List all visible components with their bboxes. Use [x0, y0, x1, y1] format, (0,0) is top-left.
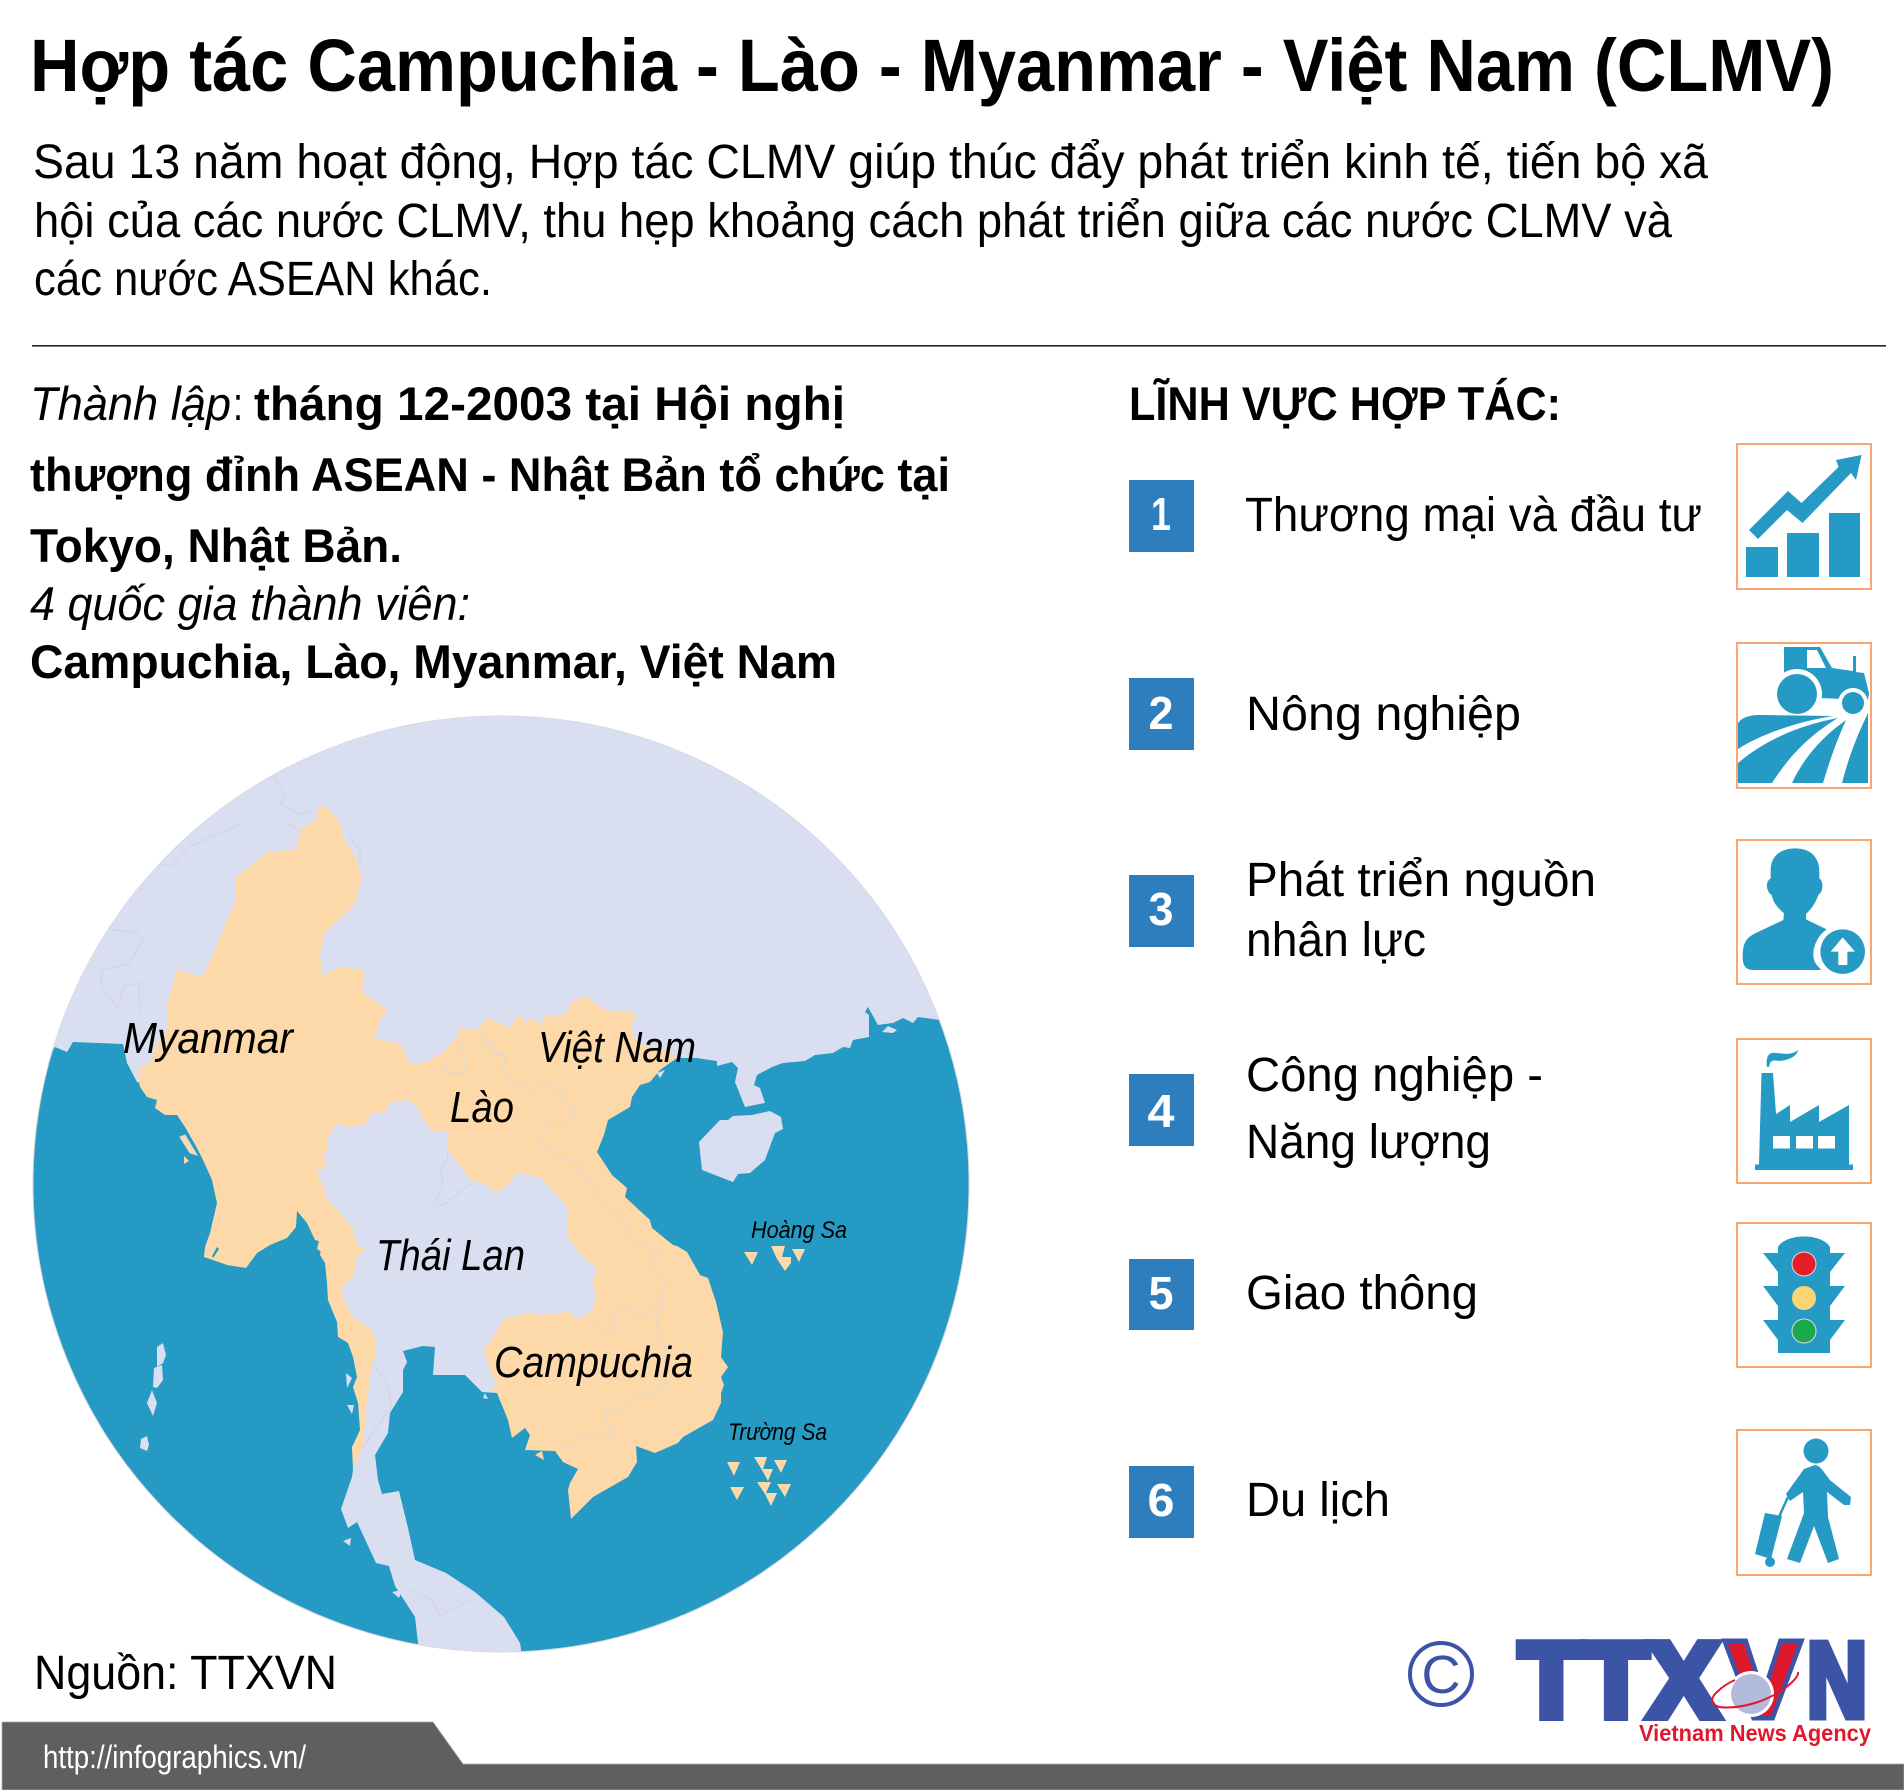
founding info text block: Tokyo, Nhật Bản.	[30, 519, 402, 572]
number badge 3: 3	[1148, 883, 1174, 935]
label: Hoàng Sa: Hoàng Sa	[751, 1217, 847, 1244]
item text 2: Nông nghiệp	[1246, 688, 1521, 741]
item 3: human resources	[1129, 840, 1871, 984]
label: Thái Lan: Thái Lan	[376, 1231, 525, 1280]
item text 4	[1246, 1049, 1543, 1169]
Myanmar	[138, 806, 442, 1470]
item text 3	[1246, 854, 1596, 967]
item 1: trade	[1129, 444, 1871, 589]
item text 3: Phát triển nguồn	[1246, 854, 1596, 907]
coastal details	[180, 1070, 665, 1460]
number badge 3	[1129, 875, 1194, 947]
item 6: tourism	[1129, 1430, 1871, 1575]
Trường Sa islands	[727, 1457, 791, 1506]
item 4: industry and energy	[1129, 1039, 1871, 1183]
item text 4: Công nghiệp -	[1246, 1049, 1543, 1102]
logo: TTXVN: TTX	[1519, 1622, 1719, 1740]
number badge 5: 5	[1148, 1267, 1174, 1319]
founding info text block: thượng đỉnh ASEAN - Nhật Bản tổ chức tại	[30, 448, 950, 501]
source: Nguồn: TTXVN	[34, 1647, 337, 1700]
small coastal islets	[140, 1026, 897, 1598]
number badge 6: 6	[1148, 1474, 1174, 1526]
country borders	[443, 1030, 668, 1451]
logo: TTXVN: N	[1807, 1622, 1867, 1740]
label: Việt Nam: Việt Nam	[538, 1023, 696, 1072]
mainland land	[52, 716, 939, 1652]
number badge 2	[1129, 678, 1194, 750]
number badge 4	[1129, 1074, 1194, 1146]
founding info text block: tháng 12-2003 tại Hội nghị	[254, 377, 845, 430]
item text 5: Giao thông	[1246, 1267, 1478, 1320]
intro text block: Sau 13 năm hoạt động, Hợp tác CLMV giúp thúc đẩy phát triển kinh tế, tiến bộ xã	[33, 136, 1708, 189]
icon: walking traveller	[1737, 1430, 1871, 1575]
intro text block: hội của các nước CLMV, thu hẹp khoảng cách phát triển giữa các nước CLMV và	[34, 195, 1672, 248]
intro text block: các nước ASEAN khác.	[34, 253, 492, 306]
logo: TTXVN: V	[1727, 1621, 1799, 1739]
item text 6: Du lịch	[1246, 1474, 1390, 1527]
founding info text block	[30, 377, 950, 688]
sea globe	[33, 716, 969, 1652]
Irrawaddy inlet	[212, 1247, 219, 1258]
item text 4: Năng lượng	[1246, 1116, 1491, 1169]
icon: copyright	[1410, 1643, 1472, 1705]
icon: factory	[1737, 1039, 1871, 1183]
Hoàng Sa islands	[744, 1246, 805, 1271]
map	[32, 716, 970, 1652]
number badge 2: 2	[1148, 687, 1174, 739]
founding info text block: Campuchia, Lào, Myanmar, Việt Nam	[30, 635, 837, 688]
cooperation heading: LĨNH VỰC HỢP TÁC:	[1129, 377, 1561, 430]
footer bar: http://infographics.vn/	[43, 1739, 306, 1775]
footer bar	[2, 1722, 1904, 1790]
logo: TTXVN	[1519, 1621, 1871, 1746]
icon: person with up arrow	[1737, 840, 1871, 984]
icon: tractor and field	[1737, 643, 1871, 788]
item text 3: nhân lực	[1246, 914, 1426, 967]
neighbouring borders	[101, 776, 472, 1615]
item 5: transport	[1129, 1223, 1871, 1367]
number badge 4: 4	[1148, 1085, 1175, 1137]
icon: traffic light	[1737, 1223, 1871, 1367]
founding info text block: 4 quốc gia thành viên:	[30, 577, 470, 630]
Laos, Vietnam and Cambodia	[408, 996, 728, 1519]
founding info text block: :	[233, 377, 243, 430]
intro text block	[33, 136, 1708, 306]
item text 1: Thương mại và đầu tư	[1245, 489, 1702, 542]
label: Trường Sa: Trường Sa	[728, 1419, 827, 1446]
label: Myanmar: Myanmar	[123, 1014, 295, 1063]
logo: TTXVN: Vietnam News Agency	[1639, 1720, 1871, 1746]
number badge 5	[1129, 1259, 1194, 1330]
label: Lào: Lào	[450, 1083, 514, 1132]
icon: chart	[1737, 444, 1871, 589]
founding info text block: Thành lập	[30, 377, 231, 430]
number badge 1: 1	[1151, 488, 1171, 540]
label: Campuchia: Campuchia	[494, 1338, 693, 1387]
item 2: agriculture	[1129, 643, 1871, 788]
Hainan island	[699, 1111, 783, 1182]
number badge 6	[1129, 1466, 1194, 1538]
number badge 1	[1129, 480, 1194, 552]
icon: copyright: C	[1422, 1645, 1460, 1705]
